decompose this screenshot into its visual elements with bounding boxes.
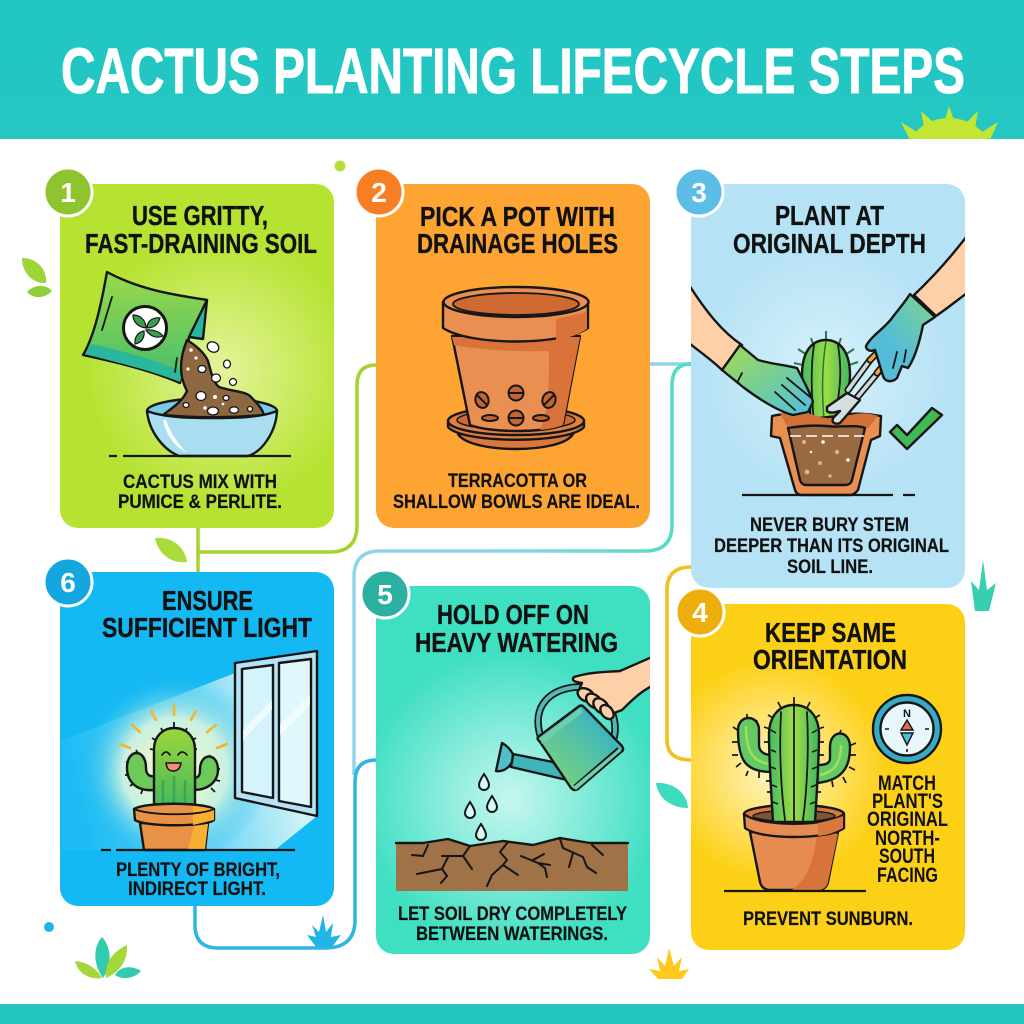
illustration: cracked dry soil [396,838,628,891]
decoration: yellow burst [649,948,689,979]
caption [714,514,949,578]
connector: step 1 to step 6 [196,528,200,572]
icon: watering can and hand [496,657,652,790]
caption: SOIL LINE. [787,556,873,578]
icon: sun on header [901,106,998,139]
illustration: cactus in pot [732,697,856,890]
pot cross section [771,412,881,495]
card background [376,586,650,954]
ground line [742,494,915,496]
heading: SUFFICIENT LIGHT [102,612,312,643]
glove: right [866,294,935,381]
cactus arm right [817,734,850,783]
cactus [794,331,858,425]
pot rim front [744,814,844,837]
heading: ORIENTATION [753,644,907,675]
heading: FAST-DRAINING SOIL [85,228,317,259]
card background [691,604,965,950]
step badge 1 [44,168,92,216]
heading: HEAVY WATERING [415,627,618,658]
caption [398,903,627,945]
caption: LET SOIL DRY COMPLETELY [398,903,627,925]
caption: PUMICE & PERLITE. [118,491,282,513]
can handle [538,687,615,738]
icon: terracotta pot with holes [443,287,588,449]
hand [573,657,652,716]
cactus trunk [769,705,819,822]
heading [733,200,926,259]
heading: PICK A POT WITH [420,201,615,232]
heading [415,599,618,658]
caption [116,859,280,900]
step badge 5: 5 [377,579,393,610]
panel: step 4 orientation [691,604,965,950]
heading [85,200,317,259]
step badge 2: 2 [371,177,387,208]
caption: INDIRECT LIGHT. [128,878,266,900]
card background [691,184,965,588]
step badge 5 [361,570,409,618]
illustration: hands planting cactus in pot [689,236,967,495]
step badge 1: 1 [60,177,76,208]
pot rim back [744,805,844,823]
side note: FACING [877,864,938,887]
icon: green check mark [890,408,942,449]
connector: step 1 to step 2 [198,365,376,552]
caption: NEVER BURY STEM [750,514,909,536]
light beam [60,660,317,850]
heading: ORIGINAL DEPTH [733,228,926,259]
step badge 3 [675,168,723,216]
decoration: bottom left plant [75,937,141,978]
caption [118,471,282,513]
side note: NORTH- [875,827,940,850]
connector: step 3 to step 4 [667,567,691,760]
heading: USE GRITTY, [132,200,268,231]
arm: left [689,285,742,370]
caption: PREVENT SUNBURN. [743,908,913,930]
side note: ORIGINAL [867,808,948,831]
icon: soil bag [83,272,207,383]
caption: SHALLOW BOWLS ARE IDEAL. [393,491,640,513]
card background [376,184,650,528]
side note: PLANT'S [872,790,943,813]
heading [753,617,907,675]
step badge 6: 6 [60,567,76,598]
can body [538,706,623,790]
caption [393,470,640,513]
ground line [101,849,295,851]
pot body [750,832,838,890]
connector: step 5 to step 6 [195,760,376,948]
side note: SOUTH [879,845,935,868]
heading [102,585,312,643]
cactus spines [732,697,856,792]
panel: step 3 depth [689,184,967,588]
decoration: teal grass [971,560,996,611]
caption: DEEPER THAN ITS ORIGINAL [714,535,949,557]
step badge 3: 3 [691,177,707,208]
heading: KEEP SAME [765,617,896,648]
step badge 4: 4 [692,597,708,628]
caption: PLENTY OF BRIGHT, [116,859,280,881]
panel: step 2 pot [376,184,650,528]
card background [60,572,334,906]
heading: DRAINAGE HOLES [417,228,618,259]
decoration: leaf between cards [155,538,187,562]
decoration: blue dot [44,922,54,932]
ground line [109,455,291,457]
step badge 2 [355,168,403,216]
caption: CACTUS MIX WITH [123,471,277,493]
can spout [511,754,567,780]
heading: PLANT AT [775,200,884,231]
panel: step 5 watering [376,586,652,954]
decoration: teal leaf [656,783,688,808]
decoration: blue burst [307,915,341,947]
icon: water drops [465,774,497,840]
decoration: leaves top left [22,258,52,297]
heading: ENSURE [162,585,253,616]
side note: MATCH [878,772,936,795]
side note [867,772,948,887]
connector: step 3 to step 5 [354,364,691,775]
decoration: lime dot [334,160,346,172]
icon: compass [873,695,941,763]
heading [417,201,618,259]
footer band [0,1004,1024,1024]
step badge 6 [44,558,92,606]
heading: HOLD OFF ON [437,599,589,630]
panel: step 6 light [60,572,334,906]
panel: step 1 soil [60,184,334,528]
icon: sparkle rays [120,705,227,748]
tongs [826,352,882,425]
card background [60,184,334,528]
caption: TERRACOTTA OR [448,470,587,492]
icon: window [235,651,317,816]
glove: left [722,345,813,415]
icon: bowl with soil mix [147,340,277,456]
illustration: happy cactus in pot [125,722,220,850]
caption: BETWEEN WATERINGS. [416,923,608,945]
ground line [724,890,866,892]
arm: right [914,236,967,316]
header band [0,0,1024,139]
connector: step 2 to step 3 [650,362,691,366]
cactus arm left [738,718,772,772]
pot [140,823,208,850]
icon: compass: N [903,708,911,720]
step badge 4 [676,588,724,636]
